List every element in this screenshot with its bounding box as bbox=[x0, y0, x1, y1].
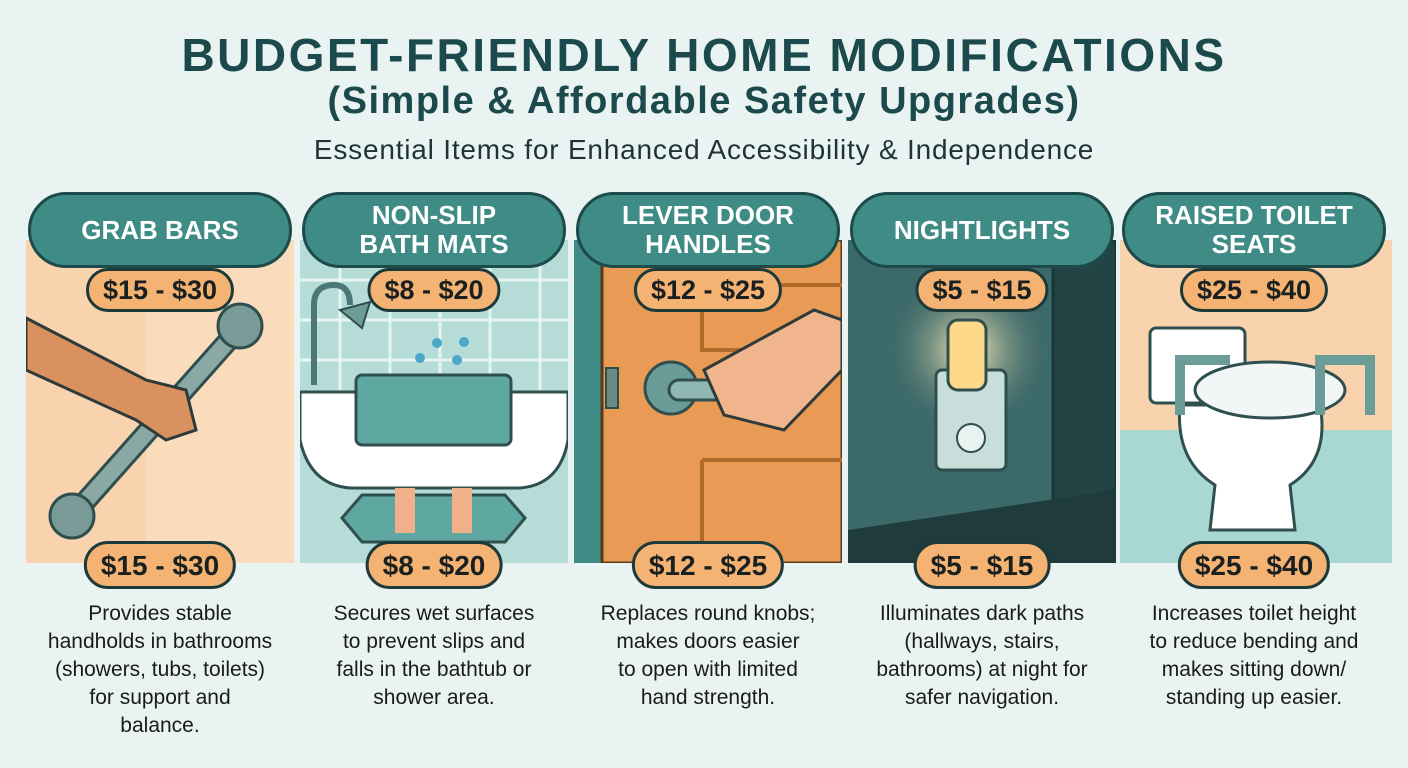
description: Increases toilet height bbox=[1152, 602, 1356, 625]
description bbox=[48, 602, 272, 737]
description: makes doors easier bbox=[616, 630, 800, 653]
subtitle: (Simple & Affordable Safety Upgrades) bbox=[328, 80, 1080, 122]
illustration: nightlight bbox=[848, 240, 1116, 563]
tagline: Essential Items for Enhanced Accessibility & Independence bbox=[314, 134, 1094, 165]
description: safer navigation. bbox=[905, 686, 1059, 709]
panel: raised toilet seats bbox=[1120, 192, 1392, 709]
description: hand strength. bbox=[641, 686, 775, 709]
illustration: toilet bbox=[1120, 240, 1392, 563]
heading: HANDLES bbox=[645, 229, 771, 259]
description bbox=[876, 602, 1088, 709]
heading: NON-SLIP bbox=[372, 200, 496, 230]
panel: grab bars bbox=[26, 192, 294, 737]
heading bbox=[302, 192, 566, 268]
illustration: grab bar bbox=[26, 240, 294, 563]
description: Illuminates dark paths bbox=[880, 602, 1084, 625]
heading bbox=[850, 192, 1114, 268]
price top: $5 - $15 bbox=[932, 275, 1032, 305]
description: falls in the bathtub or bbox=[337, 658, 531, 681]
description: for support and bbox=[89, 686, 231, 709]
price top bbox=[1180, 268, 1328, 312]
heading: BATH MATS bbox=[359, 229, 509, 259]
price bottom: $12 - $25 bbox=[649, 550, 767, 581]
heading: SEATS bbox=[1212, 229, 1296, 259]
heading: GRAB BARS bbox=[81, 214, 239, 244]
price top: $12 - $25 bbox=[651, 275, 765, 305]
description: shower area. bbox=[373, 686, 495, 709]
description bbox=[601, 602, 815, 709]
heading bbox=[576, 192, 840, 268]
price bottom: $5 - $15 bbox=[931, 550, 1033, 581]
price top bbox=[367, 268, 501, 312]
price top: $8 - $20 bbox=[384, 275, 484, 305]
description: to open with limited bbox=[618, 658, 798, 681]
description: Replaces round knobs; bbox=[601, 602, 815, 625]
description: bathrooms) at night for bbox=[876, 658, 1088, 681]
price top: $25 - $40 bbox=[1197, 275, 1311, 305]
heading: LEVER DOOR bbox=[622, 200, 794, 230]
panel: bath mats bbox=[300, 192, 568, 709]
price top bbox=[915, 268, 1049, 312]
description: (hallways, stairs, bbox=[904, 630, 1060, 653]
heading bbox=[28, 192, 292, 268]
heading: RAISED TOILET bbox=[1155, 200, 1353, 230]
price bottom: $8 - $20 bbox=[383, 550, 485, 581]
description: (showers, tubs, toilets) bbox=[55, 658, 265, 681]
description: makes sitting down/ bbox=[1162, 658, 1346, 681]
panel: nightlights bbox=[848, 192, 1116, 709]
description bbox=[334, 602, 534, 709]
price bottom bbox=[632, 541, 784, 589]
description: to prevent slips and bbox=[343, 630, 525, 653]
illustration: bathtub bbox=[300, 240, 568, 563]
heading bbox=[1122, 192, 1386, 268]
price top: $15 - $30 bbox=[103, 275, 217, 305]
price bottom bbox=[1178, 541, 1330, 589]
description: Secures wet surfaces bbox=[334, 602, 534, 625]
panel: lever handles bbox=[574, 192, 842, 709]
description: Provides stable bbox=[88, 602, 232, 625]
price bottom: $15 - $30 bbox=[101, 550, 219, 581]
price top bbox=[634, 268, 782, 312]
price top bbox=[86, 268, 234, 312]
illustration: door bbox=[574, 240, 842, 563]
title: BUDGET-FRIENDLY HOME MODIFICATIONS bbox=[181, 29, 1227, 81]
price bottom bbox=[84, 541, 236, 589]
description: standing up easier. bbox=[1166, 686, 1342, 709]
description: balance. bbox=[120, 714, 200, 737]
heading: NIGHTLIGHTS bbox=[894, 214, 1070, 244]
price bottom bbox=[366, 541, 502, 589]
price bottom bbox=[914, 541, 1050, 589]
description bbox=[1149, 602, 1358, 709]
price bottom: $25 - $40 bbox=[1195, 550, 1313, 581]
description: handholds in bathrooms bbox=[48, 630, 272, 653]
description: to reduce bending and bbox=[1149, 630, 1358, 653]
